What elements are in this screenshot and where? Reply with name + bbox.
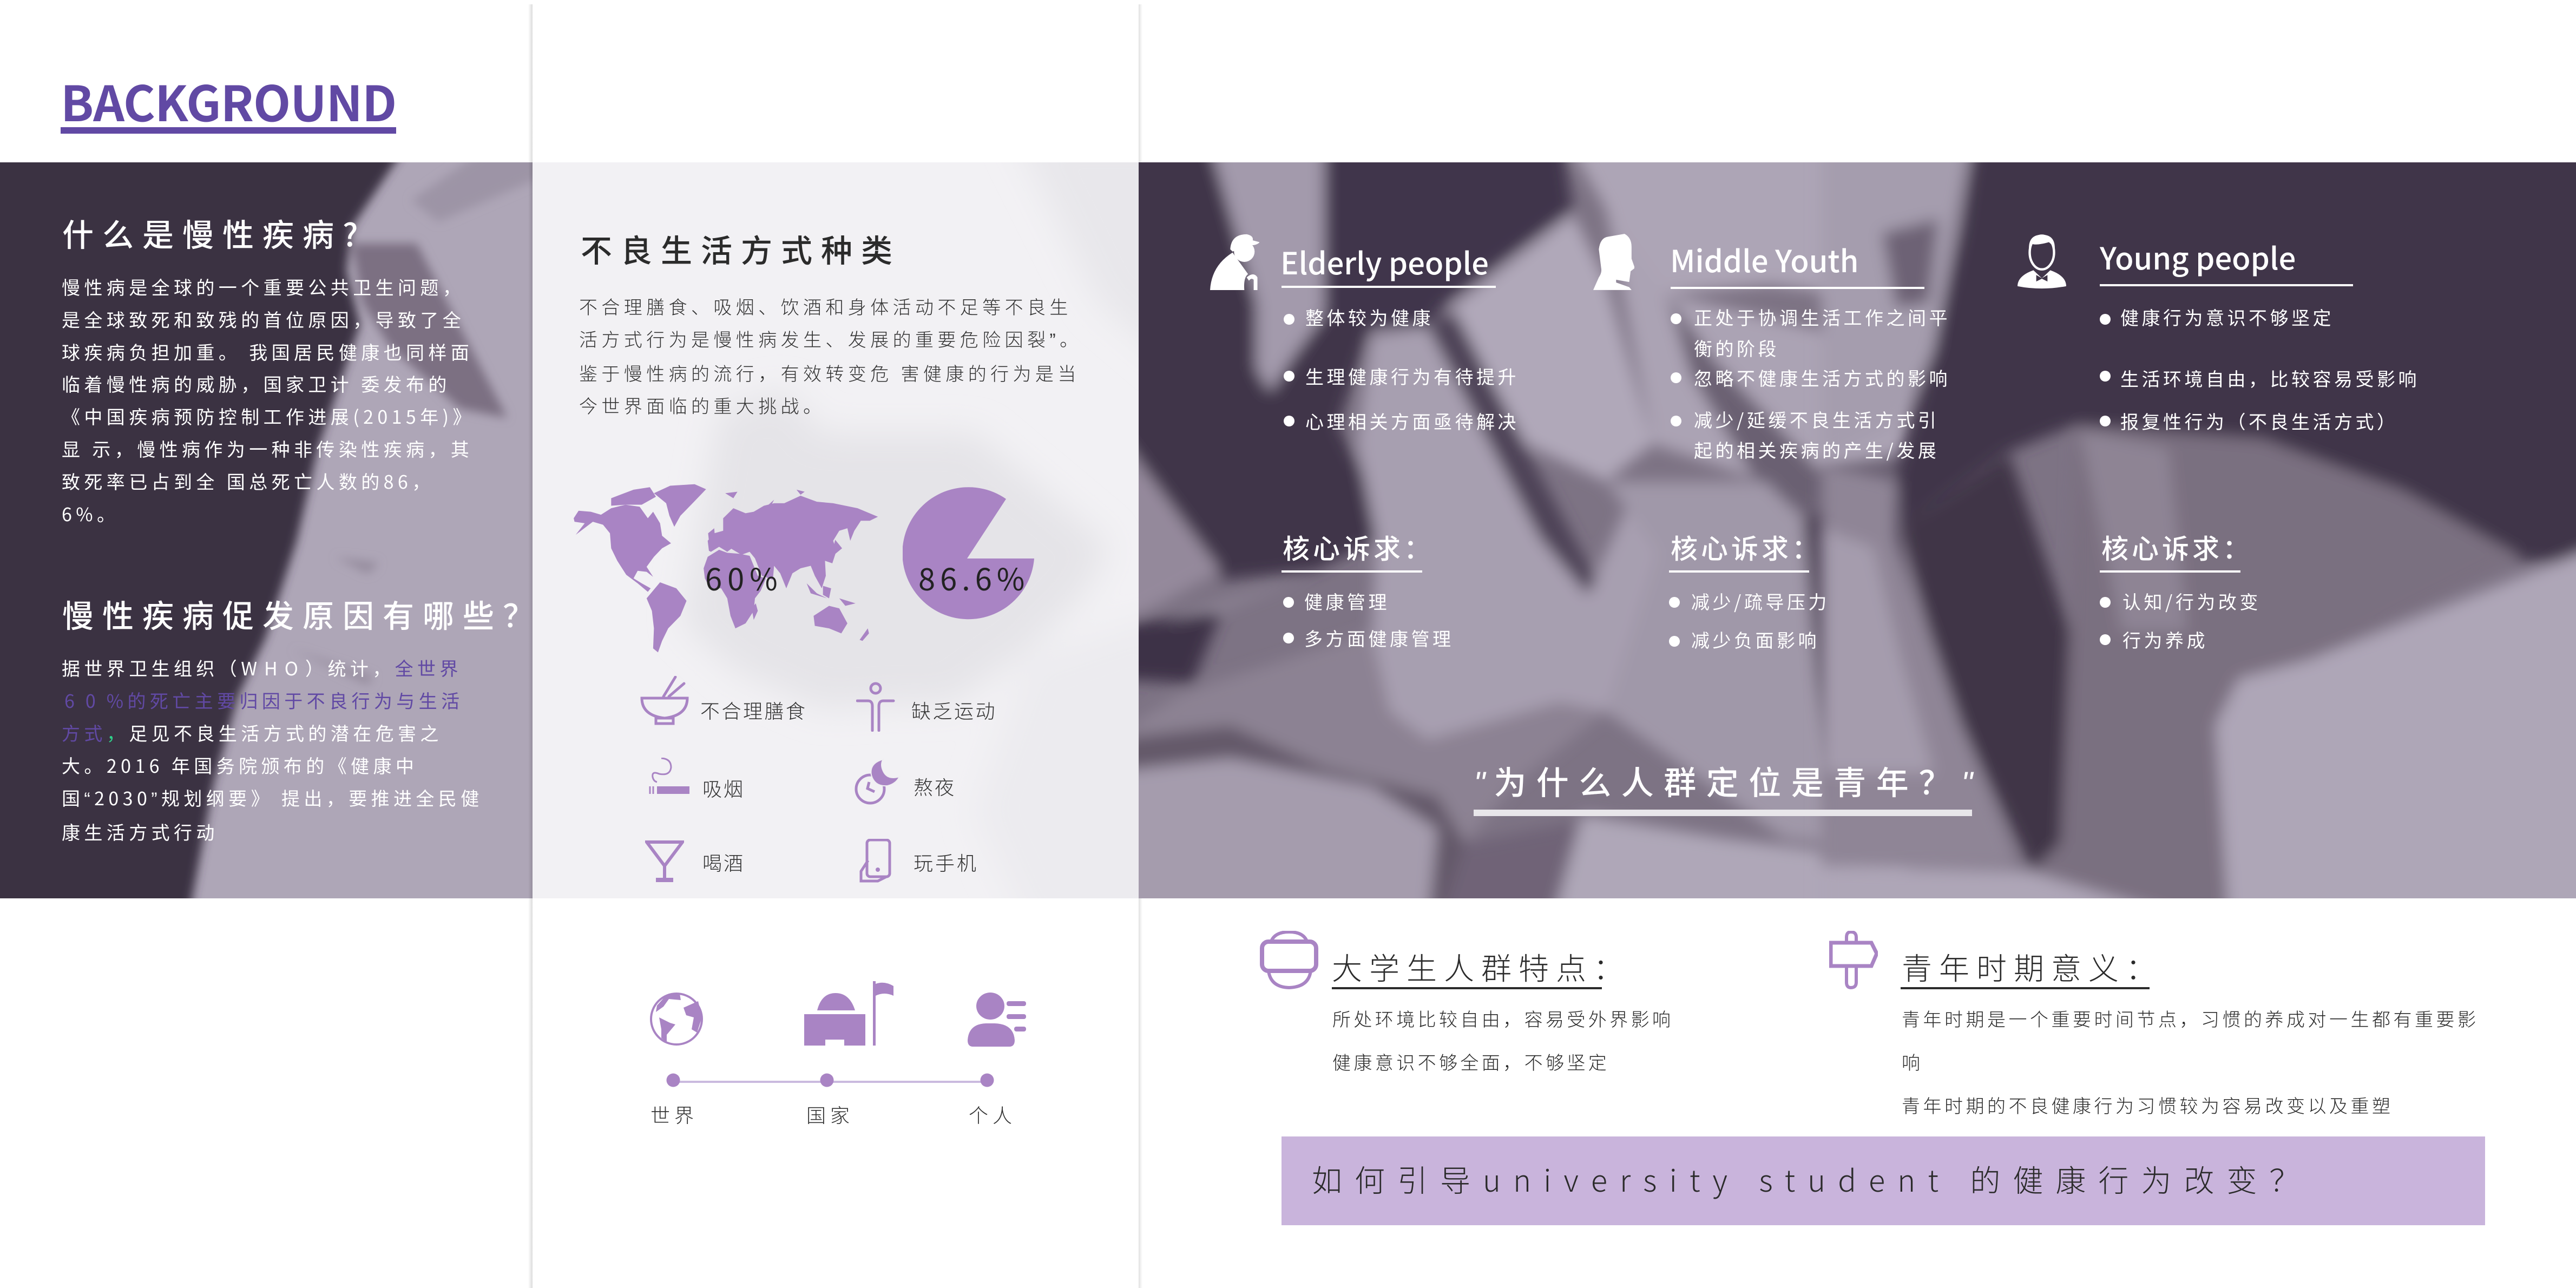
banner text: 如何引导university student 的健康行为改变？: [1312, 1157, 2312, 1201]
bullet: 心理相关方面亟待解决: [1305, 408, 1519, 434]
icon: cigarette: [649, 758, 689, 794]
bullet: 减少负面影响: [1691, 626, 1819, 653]
bullet: 报复性行为（不良生活方式）: [2120, 408, 2398, 434]
heading: what is chronic disease: 什么是慢性疾病?: [62, 210, 367, 255]
icon: middle-aged profile: [1593, 234, 1634, 290]
label: world: 世界: [650, 1100, 698, 1128]
bullet: 减少/疏导压力: [1691, 588, 1830, 614]
label: staying up late: 熬夜: [914, 772, 956, 800]
label: country: 国家: [806, 1100, 854, 1128]
icon: lack of exercise: [856, 682, 895, 732]
label: smoking: 吸烟: [702, 774, 745, 802]
icon: young person in suit: [2018, 234, 2066, 289]
bullet: 正处于协调生活工作之间平 衡的阶段: [1694, 304, 1950, 361]
label: poor diet: 不合理膳食: [700, 696, 807, 724]
banner: how to guide university students: [1282, 1136, 2485, 1225]
text block: lifestyle description: 不合理膳食、吸烟、饮酒和身体活动不足等不良生 活方式行为是慢性病发生、发展的重要危险因裂”。 鉴于慢性病的流行，有效转变危 害健康的行为是当 今世界面临的重大挑战。: [579, 293, 1082, 418]
chart: world map: [574, 484, 878, 653]
column: young people: [2018, 233, 2429, 666]
panel: unhealthy lifestyle types: [533, 162, 1139, 1128]
timeline: world to individual: [665, 1073, 996, 1088]
icon: elderly person with cane: [1210, 234, 1259, 290]
callout: why target youth: "为什么人群定位是青年？": [1474, 757, 1973, 804]
text block: causes with highlighted statistic: 据世界卫生组织（WHO）统计，全世界 60%的死亡主要归因于不良行为与生活 方式，足见不良生活方式的潜在危害之 大。2016 年国务院颁布的《健康中 国“2030”规划纲要》 提出，要推进全民健 康生活方式行动: [62, 654, 483, 845]
icon: phone in hand: [859, 839, 892, 883]
background photo, left panel: [0, 162, 533, 898]
label: lack of exercise: 缺乏运动: [911, 696, 997, 724]
panel divider shadows: [528, 4, 533, 1288]
heading: lifestyle types: 不良生活方式种类: [581, 226, 901, 271]
heading: Young people: Young people: [2100, 235, 2296, 279]
icon: bowl: [641, 676, 688, 725]
background photo, knit sweater in purple duotone: [1139, 162, 2576, 898]
bullet: 认知/行为改变: [2122, 588, 2261, 614]
title: BACKGROUND: BACKGROUND: [61, 65, 396, 135]
icon: individual: [968, 992, 1027, 1047]
bullet: 生理健康行为有待提升: [1305, 363, 1519, 389]
stat: 60%: 60%: [705, 556, 783, 600]
column: elderly people: [1210, 233, 1497, 666]
panel: population groups and youth focus: [1139, 0, 2576, 1288]
heading: core demands: 核心诉求：: [1283, 528, 1434, 567]
bullet: 减少/延缓不良生活方式引 起的相关疾病的产生/发展: [1694, 406, 1939, 463]
heading: core demands: 核心诉求：: [1671, 528, 1822, 567]
heading: core demands: 核心诉求：: [2101, 528, 2253, 567]
bullet: 多方面健康管理: [1304, 625, 1454, 651]
bullet: 健康管理: [1304, 588, 1390, 614]
bullet: 生活环境自由，比较容易受影响: [2120, 365, 2420, 391]
icon: bag: [1260, 931, 1318, 989]
heading: university student traits: 大学生人群特点：: [1332, 945, 1631, 989]
text block: chronic disease description: 慢性病是全球的一个重要公共卫生问题， 是全球致死和致残的首位原因，导致了全 球疾病负担加重。 我国居民健康也同样面 临着慢性病的威胁，国家卫计 委发布的 《中国疾病预防控制工作进展(2015年)》 显 示，慢性病作为一种非传染性疾病，其 致死率已占到全 国总死亡人数的86， 6%。: [62, 273, 475, 527]
icon: national building and flag: [804, 981, 894, 1046]
bullet: 行为养成: [2122, 626, 2208, 653]
heading: what causes chronic disease: 慢性疾病促发原因有哪些？: [62, 591, 533, 636]
heading: Elderly people: Elderly people: [1280, 240, 1489, 284]
text block: university student traits: 所处环境比较自由，容易受外界影响 健康意识不够全面，不够坚定: [1332, 1005, 1673, 1075]
panel: what are chronic diseases: [0, 65, 533, 898]
bullet: 整体较为健康: [1305, 304, 1434, 330]
label: phone use: 玩手机: [914, 848, 978, 876]
background photo, pale fabric: [533, 162, 1139, 898]
label: drinking: 喝酒: [702, 848, 745, 876]
label: individual: 个人: [969, 1100, 1016, 1128]
icon: globe: [650, 991, 703, 1047]
bullet: 忽略不健康生活方式的影响: [1694, 364, 1950, 391]
icon: signpost: [1829, 931, 1878, 989]
icon: cocktail glass: [645, 840, 684, 883]
text block: meaning of youth: 青年时期是一个重要时间节点，习惯的养成对一生都有重要影 响 青年时期的不良健康行为习惯较为容易改变以及重塑: [1902, 1005, 2479, 1118]
stat: 86.6%: 86.6%: [918, 556, 1029, 600]
heading: meaning of youth: 青年时期意义：: [1902, 945, 2163, 989]
heading: Middle Youth: Middle Youth: [1670, 238, 1858, 281]
bullet: 健康行为意识不够坚定: [2120, 304, 2334, 330]
icon: staying up late: [854, 759, 901, 805]
chart: pie 86.6%: [903, 487, 1034, 619]
column: middle youth: [1593, 233, 1950, 666]
